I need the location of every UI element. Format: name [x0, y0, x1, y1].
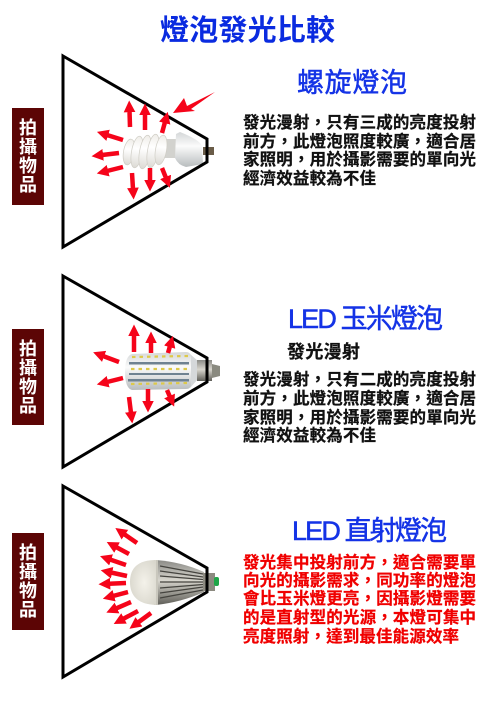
subject label box: 攝	[19, 137, 37, 157]
panel: LED corn bulb	[12, 276, 476, 467]
subject label box: 拍	[19, 543, 37, 563]
description: 發光集中投射前方，適合需要單	[243, 549, 476, 573]
subject label box: 物	[19, 156, 37, 176]
panel: LED direct bulb	[12, 486, 476, 677]
subject label box: 品	[19, 175, 37, 195]
description	[243, 366, 476, 445]
description: 經濟效益較為不佳	[243, 425, 376, 445]
subject label box: 拍	[19, 118, 37, 138]
subject label box	[12, 329, 44, 425]
description: 發光漫射，只有二成的亮度投射	[243, 366, 476, 390]
light arrows	[102, 111, 166, 189]
subheading: 發光漫射	[287, 342, 360, 362]
subject label box: 攝	[19, 562, 37, 582]
light cone	[63, 276, 207, 467]
subject label box: 物	[19, 377, 37, 397]
description: 前方，此燈泡照度較廣，適合居	[243, 385, 476, 409]
light cone	[63, 56, 207, 247]
heading: LED 直射燈泡	[292, 516, 447, 546]
light arrows	[103, 335, 170, 413]
heading: LED 玉米燈泡	[288, 304, 443, 334]
description: 經濟效益較為不佳	[243, 168, 376, 188]
description	[243, 109, 476, 188]
description: 亮度照射，達到最佳能源效率	[243, 623, 459, 647]
description: 的是直射型的光源，本燈可集中	[243, 604, 476, 628]
description: 前方，此燈泡照度較廣，適合居	[243, 128, 476, 152]
subject label box: 品	[19, 600, 37, 620]
heading: 螺旋燈泡	[297, 68, 407, 98]
description: 向光的攝影需求，同功率的燈泡	[243, 567, 476, 591]
subject label box: 品	[19, 396, 37, 416]
subject label box: 拍	[19, 339, 37, 359]
panel: spiral bulb	[12, 56, 476, 247]
callout arrow	[173, 92, 215, 113]
description: 發光漫射，只有三成的亮度投射	[243, 109, 476, 133]
light cone	[63, 486, 207, 677]
subject label box: 攝	[19, 358, 37, 378]
direct bulb image	[130, 560, 219, 605]
subject label box: 物	[19, 581, 37, 601]
description: 會比玉米燈更亮，因攝影燈需要	[243, 585, 476, 609]
subject label box	[12, 533, 44, 630]
subject label box	[12, 108, 44, 205]
title: 燈泡發光比較	[160, 14, 335, 47]
spiral bulb image	[121, 132, 214, 170]
corn bulb image	[125, 352, 220, 390]
light arrows	[109, 534, 151, 622]
description: 家照明，用於攝影需要的單向光	[243, 404, 476, 428]
description	[243, 549, 476, 647]
description: 家照明，用於攝影需要的單向光	[243, 146, 476, 170]
